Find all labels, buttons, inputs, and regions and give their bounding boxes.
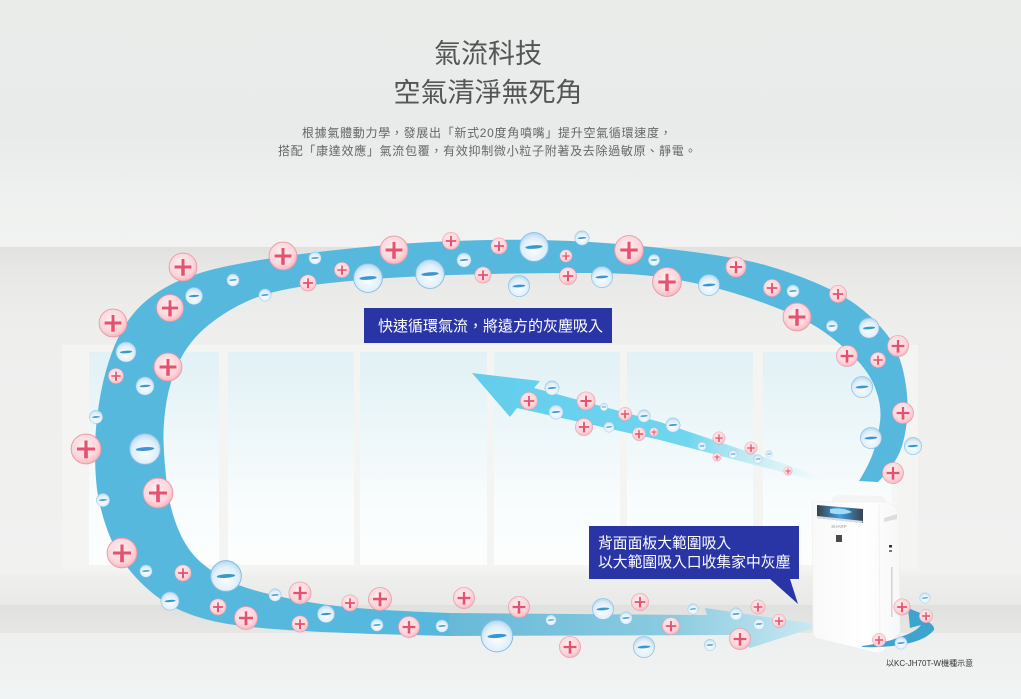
ions: right arc bbox=[648, 254, 922, 484]
ions: upper left arc bbox=[71, 242, 350, 464]
callout: fast circulation bbox=[364, 308, 612, 343]
arrow: return airflow behind purifier bbox=[862, 608, 934, 647]
description text: 搭配「康達效應」氣流包覆，有效抑制微小粒子附著及去除過敏原、靜電。 bbox=[278, 143, 697, 158]
callout: fast circulation: 快速循環氣流，將遠方的灰塵吸入 bbox=[378, 317, 603, 335]
title: 氣流科技 bbox=[434, 39, 542, 69]
background: upper area bbox=[0, 0, 1021, 247]
background: floor skirting bbox=[0, 605, 1021, 633]
background: wall bbox=[0, 247, 1021, 570]
window bbox=[62, 345, 918, 570]
description text: 根據氣體動力學，發展出「新式20度角噴嘴」提升空氣循環速度， bbox=[302, 125, 672, 140]
description text bbox=[278, 125, 697, 158]
background: floor bbox=[0, 633, 1021, 699]
air purifier: SHARP bbox=[831, 524, 847, 529]
ions: lower left curve bbox=[96, 478, 448, 638]
title bbox=[394, 39, 582, 108]
background: window sill bbox=[0, 570, 1021, 605]
ions: top arc bbox=[354, 231, 643, 297]
title: 空氣清淨無死角 bbox=[394, 78, 582, 108]
arrow: long-range airflow bbox=[472, 373, 820, 481]
callout: rear panel intake: 背面面板大範圍吸入 bbox=[598, 534, 731, 552]
caption: model note: 以KC-JH70T-W機種示意 bbox=[886, 658, 973, 668]
air purifier bbox=[812, 485, 900, 652]
arrow: bottom airflow into purifier bbox=[449, 608, 822, 648]
ions: around purifier bbox=[872, 593, 933, 649]
ions: bottom arrow bbox=[453, 587, 786, 658]
airflow loop bbox=[95, 240, 908, 636]
callout: rear panel intake bbox=[589, 526, 799, 604]
ions: long-range arrow bbox=[520, 381, 792, 475]
callout: rear panel intake: 以大範圍吸入口收集家中灰塵 bbox=[598, 553, 791, 571]
